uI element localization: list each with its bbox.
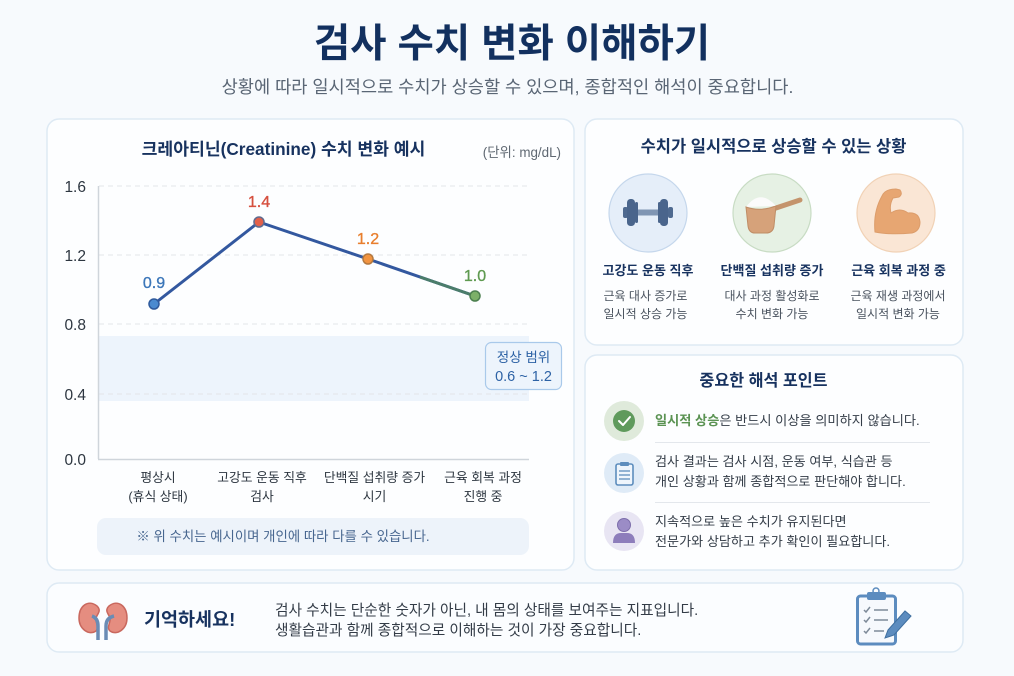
- icon: flexed arm: [857, 174, 935, 252]
- normal range callout: 정상 범위: [497, 350, 550, 365]
- item: intense exercise: 근육 대사 증가로: [604, 289, 687, 303]
- point 2 text: 개인 상황과 함께 종합적으로 판단해야 합니다.: [655, 474, 906, 489]
- icon: protein scoop: [733, 174, 811, 252]
- point 3 text: 지속적으로 높은 수치가 유지된다면: [655, 514, 847, 529]
- title: 검사 수치 변화 이해하기: [314, 22, 710, 66]
- item: muscle recovery: [850, 263, 946, 321]
- x axis labels: 근육 회복 과정: [444, 470, 522, 485]
- unit label: (단위: mg/dL): [483, 145, 561, 160]
- footnote: ※ 위 수치는 예시이며 개인에 따라 다를 수 있습니다.: [136, 529, 430, 544]
- y axis labels: [64, 179, 86, 469]
- data values: 1.0: [464, 268, 486, 285]
- panel heading: 수치가 일시적으로 상승할 수 있는 상황: [641, 137, 906, 156]
- panel: situations: [585, 119, 963, 345]
- data values: 0.9: [143, 275, 165, 292]
- item: intense exercise: 일시적 상승 가능: [604, 307, 687, 321]
- footnote: [97, 518, 529, 555]
- x axis labels: 평상시: [140, 470, 176, 485]
- data values: 1.4: [248, 194, 270, 211]
- data values: 1.2: [357, 231, 379, 248]
- point 2 text: 검사 결과는 검사 시점, 운동 여부, 식습관 등: [655, 454, 893, 469]
- y axis labels: 0.0: [64, 452, 86, 469]
- panel heading: 중요한 해석 포인트: [699, 372, 828, 390]
- subtitle: 상황에 따라 일시적으로 수치가 상승할 수 있으며, 종합적인 해석이 중요합니다.: [222, 77, 793, 97]
- item: protein intake: [721, 263, 823, 321]
- y axis labels: 0.8: [64, 317, 86, 334]
- point 3 text: 전문가와 상담하고 추가 확인이 필요합니다.: [655, 534, 890, 549]
- point 1 text: 일시적 상승은 반드시 이상을 의미하지 않습니다.: [655, 413, 920, 428]
- x axis labels: 진행 중: [464, 489, 503, 504]
- panel: creatinine chart: [47, 119, 574, 570]
- icon: person: [604, 511, 644, 551]
- panel: interpretation points: [585, 355, 963, 570]
- icon: clipboard: [604, 453, 644, 493]
- item: intense exercise: 고강도 운동 직후: [603, 263, 694, 278]
- icon: check: [604, 401, 644, 441]
- line chart: [64, 179, 562, 504]
- panel: remember banner: [47, 583, 963, 652]
- x axis labels: 단백질 섭취량 증가: [324, 470, 425, 485]
- data points: [149, 217, 480, 309]
- data line: [154, 222, 475, 304]
- normal range callout: [486, 342, 562, 390]
- x axis labels: 시기: [363, 489, 386, 504]
- icon: clipboard with pen: [858, 588, 911, 644]
- chart heading: 크레아티닌(Creatinine) 수치 변화 예시: [142, 139, 425, 159]
- remember heading: 기억하세요!: [144, 609, 235, 630]
- item: muscle recovery: 일시적 변화 가능: [856, 307, 940, 321]
- x axis labels: 고강도 운동 직후: [217, 470, 307, 485]
- item: muscle recovery: 근육 회복 과정 중: [851, 263, 946, 278]
- icon: kidneys: [79, 603, 127, 640]
- data values: [143, 194, 486, 292]
- y axis labels: 1.2: [64, 248, 86, 265]
- item: protein intake: 단백질 섭취량 증가: [721, 263, 823, 278]
- x axis labels: 검사: [250, 489, 274, 504]
- point 3 text: [655, 514, 890, 549]
- remember text: [275, 602, 698, 639]
- y axis labels: 1.6: [64, 179, 86, 196]
- normal range callout: 0.6 ~ 1.2: [495, 369, 552, 385]
- item: protein intake: 수치 변화 가능: [736, 307, 808, 321]
- item: protein intake: 대사 과정 활성화로: [724, 289, 820, 303]
- y axis labels: 0.4: [64, 387, 86, 404]
- item: muscle recovery: 근육 재생 과정에서: [850, 289, 946, 303]
- item: intense exercise: [603, 263, 694, 321]
- remember text: 검사 수치는 단순한 숫자가 아닌, 내 몸의 상태를 보여주는 지표입니다.: [275, 602, 698, 619]
- point 2 text: [655, 454, 906, 489]
- remember text: 생활습관과 함께 종합적으로 이해하는 것이 가장 중요합니다.: [275, 622, 641, 639]
- x axis labels: (휴식 상태): [128, 489, 188, 504]
- normal range band: [99, 336, 529, 401]
- icon: dumbbell: [609, 174, 687, 252]
- x axis labels: [128, 470, 522, 504]
